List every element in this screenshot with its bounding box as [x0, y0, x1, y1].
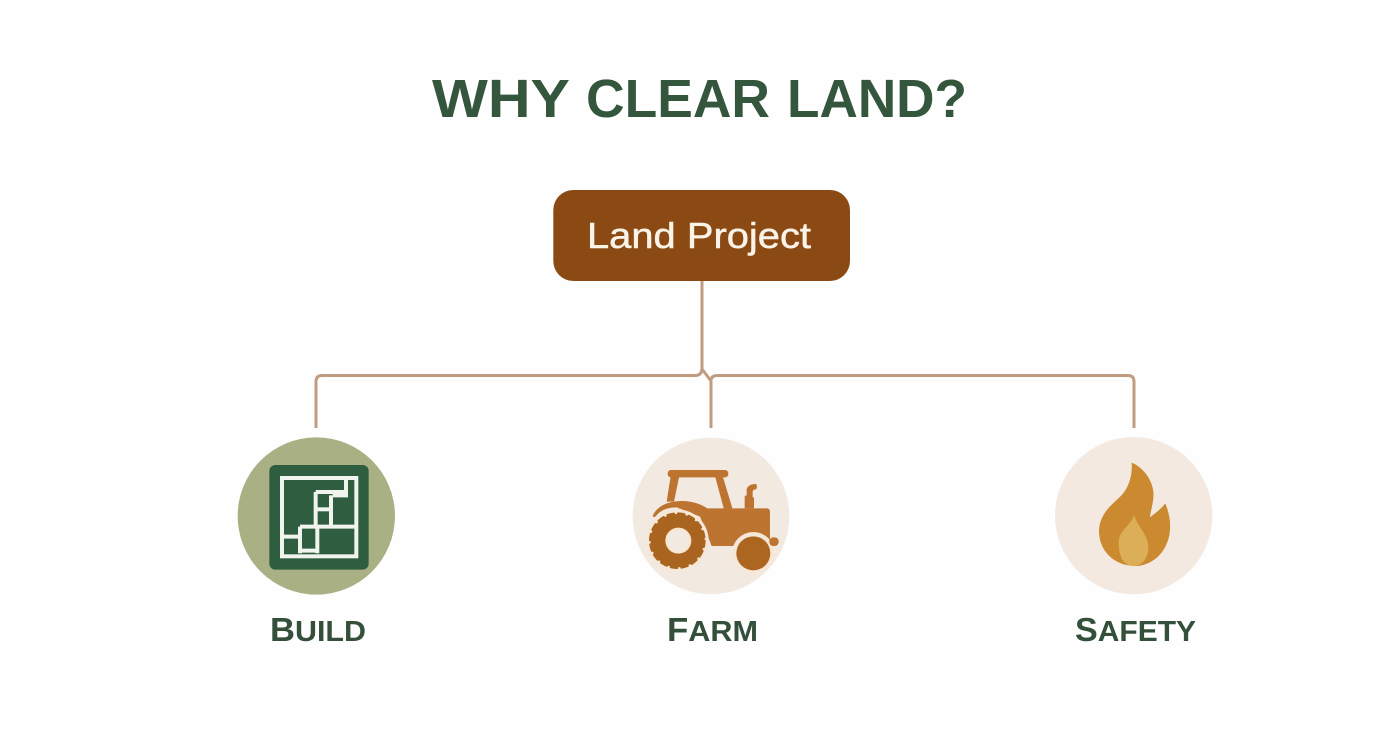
title: WHY	[432, 69, 570, 129]
root node: Land Project: Land Project	[587, 215, 811, 256]
icon: tractor	[633, 438, 789, 594]
branch: Build	[238, 437, 395, 648]
root node: Land Project	[553, 190, 850, 281]
title: CLEAR	[586, 69, 770, 129]
label: Farm: FARM	[667, 611, 758, 648]
connector tree	[316, 281, 1134, 428]
label: Build: BUILD	[270, 611, 366, 648]
icon: blueprint floor plan	[238, 437, 395, 595]
title	[432, 69, 967, 129]
title: LAND?	[787, 69, 967, 129]
icon: flame	[1055, 437, 1212, 594]
branch: Farm	[633, 438, 789, 648]
label: Safety: SAFETY	[1075, 611, 1196, 648]
branch: Safety	[1055, 437, 1212, 648]
